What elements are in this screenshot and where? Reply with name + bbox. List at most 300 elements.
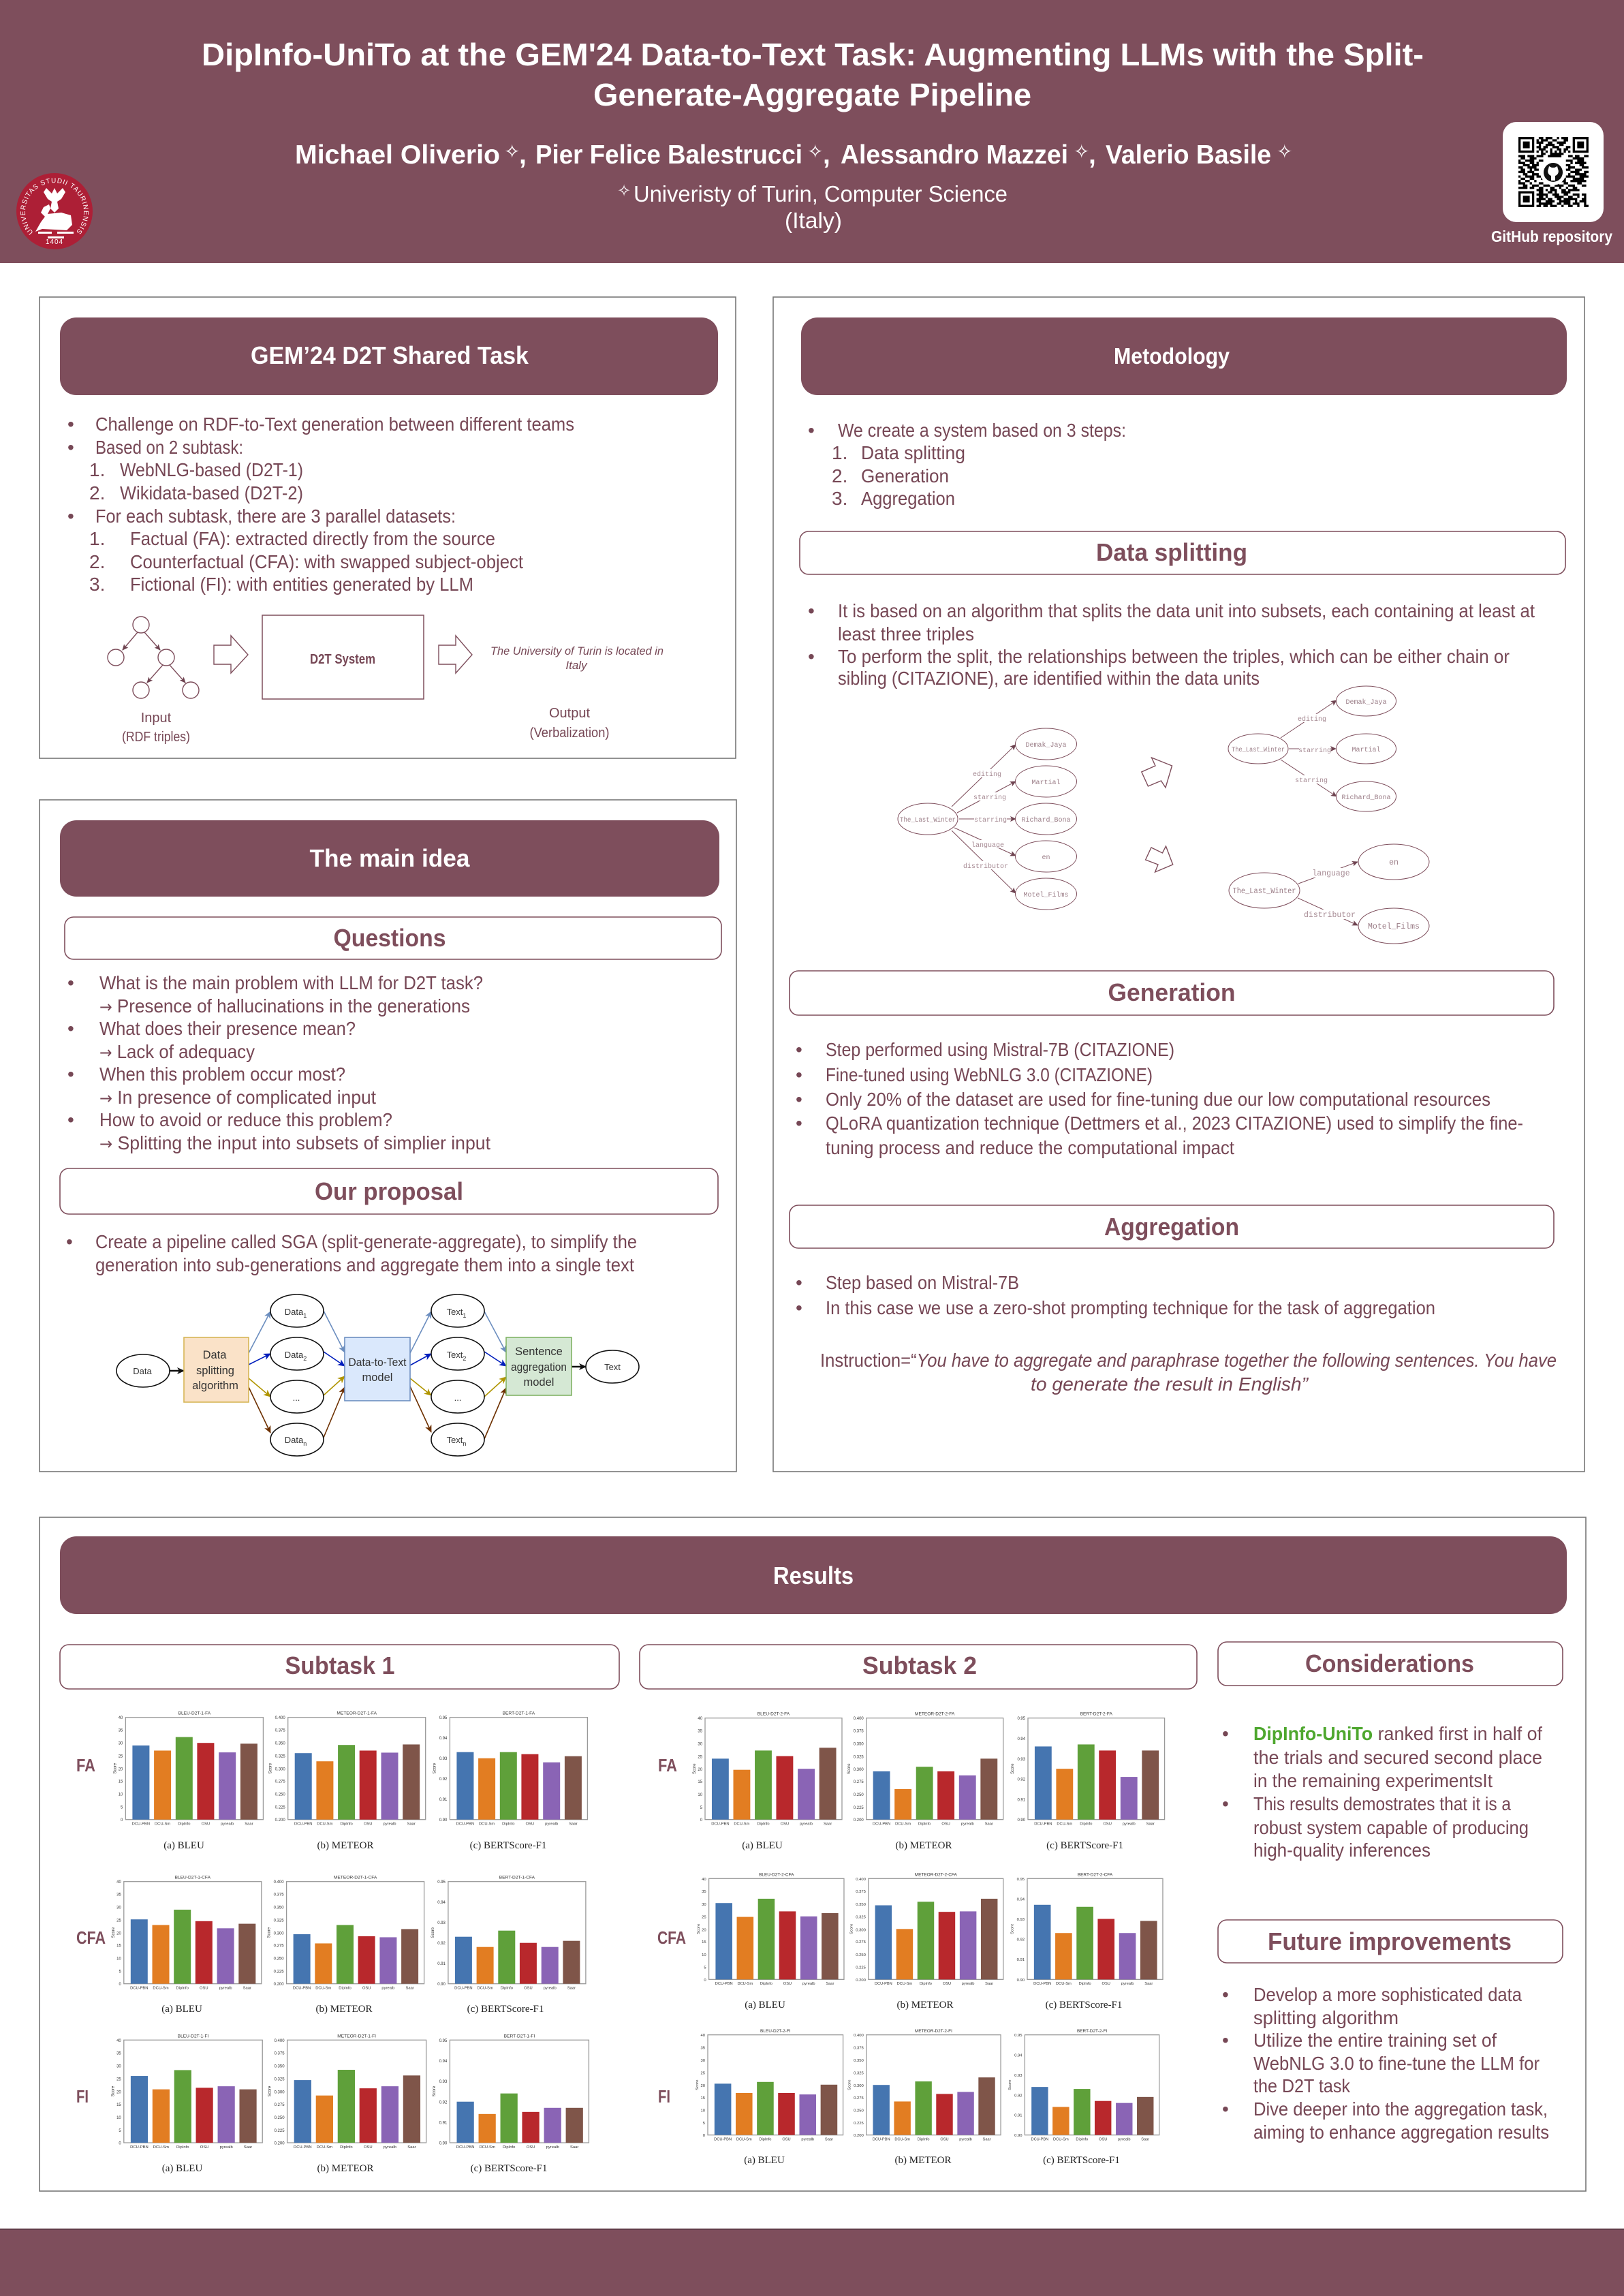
text block: future improvements: Develop a more sophisticated data xyxy=(1253,1984,1522,2005)
chart: BERT D2T-2 FA: (c) BERTScore-F1 xyxy=(1046,1840,1123,1851)
chart: METEOR D2T-1 FA: 0.325 xyxy=(275,1755,285,1759)
chart: BERT D2T-1 CFA: 0.93 xyxy=(437,1921,446,1925)
diagram: split graph 1: editing xyxy=(1298,715,1326,724)
chart: METEOR D2T-2 CFA xyxy=(849,1872,1003,2011)
sub-heading: Aggregation: Aggregation xyxy=(1104,1213,1239,1241)
authors: Pier Felice Balestrucci xyxy=(535,140,802,170)
chart: METEOR D2T-2 FI: 0.250 xyxy=(854,2109,864,2113)
text block: considerations: the trials and secured second place xyxy=(1253,1747,1542,1768)
chart: METEOR D2T-2 CFA: 0.250 xyxy=(856,1953,866,1957)
chart: BERT D2T-2 FI: 0.91 xyxy=(1014,2114,1022,2118)
chart: METEOR D2T-1 FA: (b) METEOR xyxy=(317,1840,373,1851)
chart: BLEU D2T-2 CFA: 0 xyxy=(704,1979,706,1983)
chart: METEOR D2T-1 CFA: METEOR-D2T-1-CFA xyxy=(334,1876,377,1880)
chart: METEOR D2T-1 FA: 0.200 xyxy=(275,1818,285,1822)
diagram: split graph 1: starring xyxy=(1298,747,1331,755)
chart: METEOR D2T-1 FI: 0.300 xyxy=(274,2091,285,2095)
chart: METEOR D2T-2 FA: pyrealb xyxy=(961,1822,974,1827)
chart: METEOR D2T-2 FI: OSU xyxy=(940,2138,949,2142)
chart: BERT D2T-1 FI: DCU-Sm xyxy=(479,2145,495,2150)
chart: BERT D2T-1 FI: 0.93 xyxy=(439,2080,448,2084)
chart: BERT D2T-1 FA: 0.94 xyxy=(439,1737,448,1741)
chart: METEOR D2T-2 FA: DipInfo xyxy=(918,1822,931,1827)
chart: METEOR D2T-1 FA: DCU-PBN xyxy=(294,1822,312,1827)
chart: BLEU D2T-2 FA: 35 xyxy=(698,1730,703,1734)
chart: BERT D2T-2 FA: Saar xyxy=(1146,1822,1155,1827)
chart: METEOR D2T-2 CFA: METEOR-D2T-2-CFA xyxy=(915,1872,958,1877)
sub-heading: Considerations xyxy=(1218,1642,1563,1686)
chart: BERT D2T-2 FI: 0.92 xyxy=(1014,2094,1022,2098)
chart: METEOR D2T-2 CFA: DCU-Sm xyxy=(897,1982,913,1986)
text block: future improvements: • xyxy=(1222,2098,1229,2120)
text block: task description: • xyxy=(67,437,74,458)
diagram: SGA pipeline: ... xyxy=(454,1393,461,1403)
chart: BERT D2T-1 FA: 0.93 xyxy=(439,1757,448,1761)
chart: BLEU D2T-1 FA: (a) BLEU xyxy=(163,1840,204,1851)
text block: task description: Wikidata-based (D2T-2) xyxy=(120,482,303,503)
authors: , xyxy=(1089,140,1096,170)
text block: future improvements xyxy=(1222,1984,1549,2143)
chart: BLEU D2T-1 FI xyxy=(112,2034,262,2174)
chart: BLEU D2T-2 CFA: Saar xyxy=(826,1982,834,1986)
chart: METEOR D2T-2 FA: 0.375 xyxy=(854,1730,864,1734)
chart: BERT D2T-2 FA: Score xyxy=(1011,1763,1015,1774)
chart: METEOR D2T-1 CFA xyxy=(268,1876,424,2015)
icon: University of Turin seal: 1404 xyxy=(46,238,63,246)
diagram: input tree: (RDF triples) xyxy=(122,730,190,745)
diagram: split graph 2: language xyxy=(1312,869,1350,878)
chart: METEOR D2T-2 FA xyxy=(847,1712,1003,1851)
text block: questions: What does their presence mean? xyxy=(99,1018,356,1039)
authors: ✧ xyxy=(1277,141,1292,162)
diagram: SGA pipeline: algorithm xyxy=(192,1380,238,1392)
sub-heading: Data splitting xyxy=(800,531,1565,574)
text block: questions: • xyxy=(67,972,74,993)
chart: METEOR D2T-2 CFA: 0.350 xyxy=(856,1903,866,1907)
chart: BLEU D2T-2 FA: (a) BLEU xyxy=(742,1840,783,1851)
affiliation xyxy=(617,181,1008,233)
chart: BLEU D2T-1 CFA: Saar xyxy=(243,1987,251,1991)
chart: METEOR D2T-2 FI xyxy=(847,2029,1001,2166)
chart: BLEU D2T-1 CFA: 30 xyxy=(116,1906,121,1910)
chart: BERT D2T-2 FA: pyrealb xyxy=(1123,1822,1136,1827)
chart: BERT D2T-1 FA: 0.92 xyxy=(439,1778,448,1782)
chart: BERT D2T-2 FI: Score xyxy=(1008,2080,1012,2090)
chart: BLEU D2T-1 FI: BLEU-D2T-1-FI xyxy=(178,2034,209,2038)
diagram: SGA pipeline: n xyxy=(303,1440,307,1447)
text block: future improvements: Utilize the entire training set of xyxy=(1253,2030,1497,2051)
chart: BLEU D2T-1 CFA xyxy=(112,1876,262,2015)
output sentence and label: Output xyxy=(549,706,590,721)
chart: METEOR D2T-2 CFA: DipInfo xyxy=(920,1982,932,1986)
chart: METEOR D2T-1 CFA: 0.350 xyxy=(274,1906,284,1910)
instruction prompt xyxy=(820,1350,1557,1395)
text block: task description: WebNLG-based (D2T-1) xyxy=(120,459,303,480)
chart: BERT D2T-1 FI: OSU xyxy=(527,2145,535,2150)
chart: BLEU D2T-1 FI: pyrealb xyxy=(220,2145,233,2150)
text block: task description: Factual (FA): extracted directly from the source xyxy=(130,528,495,549)
chart: BERT D2T-2 CFA: 0.90 xyxy=(1017,1979,1025,1983)
diagram: SGA pipeline: Data xyxy=(285,1307,303,1317)
chart: BERT D2T-1 FA: Saar xyxy=(569,1822,578,1827)
text block: questions: How to avoid or reduce this problem? xyxy=(99,1109,392,1130)
text block: generation: • xyxy=(796,1113,802,1134)
chart: BLEU D2T-2 CFA: Score xyxy=(697,1923,701,1934)
chart: BERT D2T-1 FI: 0.90 xyxy=(439,2142,448,2146)
chart: BLEU D2T-1 FI: (a) BLEU xyxy=(162,2163,202,2174)
chart: METEOR D2T-2 CFA: (b) METEOR xyxy=(897,2000,953,2011)
chart: BLEU D2T-1 FI: DCU-PBN xyxy=(130,2145,149,2150)
chart: BLEU D2T-2 FI: DipInfo xyxy=(759,2138,771,2142)
chart: BERT D2T-1 FI: 0.94 xyxy=(439,2060,448,2064)
chart: BERT D2T-1 CFA: 0.91 xyxy=(437,1962,446,1966)
chart: BLEU D2T-1 FA: 5 xyxy=(121,1806,123,1810)
sub-heading: Questions: Questions xyxy=(334,924,446,952)
chart: BLEU D2T-1 CFA: 5 xyxy=(119,1970,121,1974)
text block: task description: 3. xyxy=(89,574,105,595)
chart: METEOR D2T-2 FA: Saar xyxy=(985,1822,993,1827)
chart: BLEU D2T-1 FI: 15 xyxy=(116,2103,121,2107)
text block: generation: Step performed using Mistral-7B (CITAZIONE) xyxy=(826,1039,1174,1060)
diagram: full RDF graph: Demak_Jaya xyxy=(1025,741,1067,749)
chart: BERT D2T-1 CFA: 0.90 xyxy=(437,1983,446,1987)
chart: BERT D2T-1 FA: (c) BERTScore-F1 xyxy=(470,1840,546,1851)
chart: METEOR D2T-1 FI: METEOR-D2T-1-FI xyxy=(337,2034,376,2038)
chart: BLEU D2T-2 FI: 5 xyxy=(703,2122,706,2126)
chart: BLEU D2T-1 FA: 0 xyxy=(121,1818,123,1822)
diagram: SGA pipeline: 2 xyxy=(463,1355,466,1362)
panel: GEM'24 D2T Shared Task xyxy=(40,297,736,758)
text block: generation xyxy=(796,1039,1523,1158)
chart: METEOR D2T-2 FI: pyrealb xyxy=(959,2138,972,2142)
chart: BERT D2T-2 CFA: OSU xyxy=(1102,1982,1110,1986)
diagram: split graph 1: Demak_Jaya xyxy=(1345,698,1387,707)
row label FI subtask 2: FI xyxy=(658,2086,670,2107)
chart: BLEU D2T-2 FI: 40 xyxy=(701,2034,706,2038)
arrow xyxy=(1142,758,1172,788)
chart: BLEU D2T-2 FA: 0 xyxy=(700,1818,703,1822)
instruction prompt: Instruction=“You have to aggregate and paraphrase together the following sentences. You have xyxy=(820,1350,1557,1371)
diagram: full RDF graph: starring xyxy=(973,794,1006,802)
chart: BLEU D2T-1 FI: 10 xyxy=(116,2116,121,2120)
chart: METEOR D2T-2 FA: DCU-PBN xyxy=(873,1822,890,1827)
chart: METEOR D2T-2 FI: Saar xyxy=(983,2138,991,2142)
chart: METEOR D2T-1 FA: 0.350 xyxy=(275,1742,285,1746)
sub-heading: Generation: Generation xyxy=(1108,978,1236,1006)
sub-heading: Future improvements xyxy=(1218,1920,1563,1963)
chart: BLEU D2T-2 FA: Saar xyxy=(824,1822,832,1827)
chart: BLEU D2T-1 FA: 15 xyxy=(119,1780,123,1784)
chart: BERT D2T-2 CFA: Score xyxy=(1010,1923,1014,1934)
chart: METEOR D2T-1 FA: 0.375 xyxy=(275,1729,285,1733)
chart: BERT D2T-2 FI: BERT-D2T-2-FI xyxy=(1077,2029,1107,2034)
sub-heading: Subtask 1 xyxy=(60,1645,619,1689)
chart: BERT D2T-1 FA: 0.90 xyxy=(439,1818,448,1822)
text block: task description xyxy=(67,414,574,595)
chart: METEOR D2T-2 FA: 0.250 xyxy=(854,1793,864,1797)
diagram: SGA pipeline: Data xyxy=(285,1350,303,1360)
text block: task description: 2. xyxy=(89,482,105,503)
text block: steps: Aggregation xyxy=(861,488,955,509)
chart: BERT D2T-1 CFA: Saar xyxy=(567,1987,576,1991)
row label FA subtask 2: FA xyxy=(658,1755,677,1775)
chart: BLEU D2T-1 FI: 20 xyxy=(116,2091,121,2095)
text block: task description: Counterfactual (CFA): with swapped subject-object xyxy=(130,551,523,572)
chart: METEOR D2T-2 CFA: DCU-PBN xyxy=(875,1982,892,1986)
chart: BERT D2T-1 FA xyxy=(433,1711,587,1851)
chart: BERT D2T-1 CFA: 0.95 xyxy=(437,1880,446,1884)
text block: future improvements: • xyxy=(1222,2030,1229,2051)
arrows xyxy=(170,1311,586,1439)
diagram: SGA pipeline: Text xyxy=(604,1362,621,1372)
chart: BLEU D2T-2 CFA: DCU-PBN xyxy=(715,1982,733,1986)
chart: BLEU D2T-1 CFA: BLEU-D2T-1-CFA xyxy=(175,1876,211,1880)
chart: BERT D2T-2 FA: 0.93 xyxy=(1017,1758,1026,1762)
chart: BLEU D2T-1 FI: DCU-Sm xyxy=(153,2145,169,2150)
chart: BLEU D2T-2 FI: 10 xyxy=(701,2109,706,2113)
chart: METEOR D2T-1 FI: (b) METEOR xyxy=(317,2163,373,2174)
chart: METEOR D2T-2 CFA: Score xyxy=(849,1923,854,1934)
row label FI subtask 1: FI xyxy=(76,2086,89,2107)
diagram: SGA pipeline: Data xyxy=(203,1349,227,1361)
diagram: split graph 2 xyxy=(1229,844,1429,944)
chart: BLEU D2T-2 FI: 20 xyxy=(701,2084,706,2088)
sub-heading: Subtask 2: Subtask 2 xyxy=(862,1651,977,1679)
chart: BERT D2T-2 FA: OSU xyxy=(1103,1822,1112,1827)
box: D2T system xyxy=(262,615,424,699)
output sentence and label: Italy xyxy=(565,659,588,672)
chart: BERT D2T-1 FI: Saar xyxy=(570,2145,578,2150)
diagram: full RDF graph: language xyxy=(971,841,1004,850)
chart: BLEU D2T-1 FI: 35 xyxy=(116,2051,121,2055)
chart: METEOR D2T-1 FA: 0.275 xyxy=(275,1780,285,1784)
chart: BLEU D2T-1 FA: BLEU-D2T-1-FA xyxy=(178,1711,211,1716)
diagram: input tree xyxy=(108,617,199,745)
chart: BERT D2T-1 FI xyxy=(433,2034,589,2174)
chart: BLEU D2T-2 CFA: 30 xyxy=(702,1903,706,1907)
heading xyxy=(60,1536,1567,1614)
text block: aggregation: In this case we use a zero-shot prompting technique for the task of aggregation xyxy=(826,1297,1435,1318)
arrow xyxy=(439,636,472,673)
chart: BERT D2T-2 CFA: Saar xyxy=(1144,1982,1153,1986)
text block: generation: Only 20% of the dataset are used for fine-tuning due our low computational resources xyxy=(826,1089,1490,1110)
authors: ✧ xyxy=(1074,141,1089,162)
diagram: SGA pipeline: Data xyxy=(133,1366,152,1376)
authors: ✧ xyxy=(807,141,823,162)
row label FA subtask 1: FA xyxy=(76,1755,95,1775)
chart: BLEU D2T-1 FA: pyrealb xyxy=(221,1822,234,1827)
chart: BERT D2T-1 FI: DipInfo xyxy=(503,2145,515,2150)
diagram: split graph 1: The_Last_Winter xyxy=(1232,746,1285,754)
chart: METEOR D2T-2 FI: Score xyxy=(847,2080,852,2090)
chart: BLEU D2T-2 FA: 25 xyxy=(698,1755,703,1759)
text block: task description: 2. xyxy=(89,551,105,572)
chart: METEOR D2T-1 CFA: 0.325 xyxy=(274,1919,284,1923)
chart: BERT D2T-1 FI: (c) BERTScore-F1 xyxy=(471,2163,547,2174)
diagram: SGA pipeline: Text xyxy=(447,1307,463,1317)
chart: BLEU D2T-1 CFA: OSU xyxy=(200,1987,208,1991)
chart: METEOR D2T-1 FI xyxy=(268,2034,426,2174)
chart: METEOR D2T-1 CFA: 0.375 xyxy=(274,1893,284,1897)
diagram: split graph 1 xyxy=(1228,686,1396,811)
text block: data splitting: To perform the split, the relationships between the triples, which can be either chain or xyxy=(838,646,1510,667)
chart: METEOR D2T-2 FI: 0.350 xyxy=(854,2059,864,2063)
chart: BERT D2T-1 CFA: OSU xyxy=(524,1987,533,1991)
chart: METEOR D2T-2 CFA: OSU xyxy=(943,1982,951,1986)
chart: BLEU D2T-2 FA: 30 xyxy=(698,1742,703,1746)
chart: BERT D2T-1 FI: BERT-D2T-1-FI xyxy=(504,2034,535,2038)
diagram: SGA pipeline: Text xyxy=(447,1350,463,1360)
chart: METEOR D2T-1 FI: 0.275 xyxy=(274,2103,285,2107)
chart: METEOR D2T-1 FI: OSU xyxy=(364,2145,373,2150)
panel: Results xyxy=(40,1517,1586,2191)
chart: METEOR D2T-1 FA: Saar xyxy=(407,1822,416,1827)
chart: METEOR D2T-1 CFA: 0.225 xyxy=(274,1970,284,1974)
text block: future improvements: • xyxy=(1222,1984,1229,2005)
chart: METEOR D2T-1 CFA: 0.200 xyxy=(274,1983,284,1987)
affiliation: Univeristy of Turin, Computer Science xyxy=(634,181,1008,206)
chart: BERT D2T-2 FI: 0.93 xyxy=(1014,2074,1022,2078)
chart: BERT D2T-1 FI: DCU-PBN xyxy=(456,2145,474,2150)
chart: BERT D2T-2 FA: DCU-PBN xyxy=(1034,1822,1052,1827)
chart: METEOR D2T-2 FI: 0.375 xyxy=(854,2046,864,2050)
chart: BLEU D2T-1 CFA: DCU-PBN xyxy=(130,1987,149,1991)
text block: steps: 3. xyxy=(832,488,847,509)
chart: BLEU D2T-2 FI: Saar xyxy=(825,2138,833,2142)
box: D2T system: D2T System xyxy=(310,652,375,667)
text block: aggregation: • xyxy=(796,1272,802,1293)
text block: considerations: in the remaining experimentsIt xyxy=(1253,1770,1493,1791)
diagram: SGA pipeline: n xyxy=(463,1440,466,1447)
sub-heading: Subtask 2 xyxy=(640,1645,1197,1689)
chart: BLEU D2T-2 FI: DCU-Sm xyxy=(736,2138,752,2142)
title: DipInfo-UniTo at the GEM'24 Data-to-Text Task: Augmenting LLMs with the Split- xyxy=(202,37,1424,72)
heading: The main idea xyxy=(309,844,470,872)
chart: METEOR D2T-1 CFA: DCU-Sm xyxy=(315,1987,332,1991)
chart: METEOR D2T-1 FA: pyrealb xyxy=(383,1822,396,1827)
chart: METEOR D2T-2 CFA: 0.200 xyxy=(856,1979,866,1983)
output sentence and label xyxy=(490,645,663,741)
chart: BERT D2T-1 FA: DCU-PBN xyxy=(456,1822,474,1827)
heading: Results xyxy=(773,1562,854,1589)
chart: BLEU D2T-1 FA xyxy=(113,1711,263,1851)
chart: METEOR D2T-2 FI: DCU-PBN xyxy=(873,2138,890,2142)
text block: future improvements: the D2T task xyxy=(1253,2075,1351,2096)
chart: BERT D2T-1 FI: 0.95 xyxy=(439,2039,448,2043)
authors xyxy=(295,140,1292,170)
chart: BLEU D2T-2 CFA: BLEU-D2T-2-CFA xyxy=(759,1872,794,1877)
chart: BLEU D2T-1 FI: 40 xyxy=(116,2039,121,2043)
diagram: input tree: Input xyxy=(141,711,172,726)
text block: considerations xyxy=(1222,1723,1542,1861)
chart: BERT D2T-2 CFA: BERT-D2T-2-CFA xyxy=(1078,1872,1113,1877)
chart: METEOR D2T-2 CFA: 0.275 xyxy=(856,1940,866,1944)
chart: METEOR D2T-2 FA: 0.225 xyxy=(854,1806,864,1810)
sub-heading: Future improvements: Future improvements xyxy=(1268,1927,1512,1955)
chart: METEOR D2T-2 FI: 0.225 xyxy=(854,2122,864,2126)
chart: BLEU D2T-1 FA: 35 xyxy=(119,1729,123,1733)
chart: BLEU D2T-2 FI: OSU xyxy=(782,2138,791,2142)
chart: BLEU D2T-2 CFA: pyrealb xyxy=(802,1982,815,1986)
text block: data splitting: sibling (CITAZIONE), are identified within the data units xyxy=(838,668,1260,689)
chart: METEOR D2T-1 FI: Saar xyxy=(407,2145,416,2150)
text block: proposal: • xyxy=(66,1231,73,1252)
diagram: SGA pipeline: 1 xyxy=(463,1312,466,1319)
text block: considerations: This results demostrates that it is a xyxy=(1253,1793,1511,1814)
chart: METEOR D2T-2 FA: METEOR-D2T-2-FA xyxy=(915,1712,955,1717)
text block: questions xyxy=(67,972,490,1153)
text block: task description: • xyxy=(67,506,74,527)
text block: questions: • xyxy=(67,1018,74,1039)
chart: BLEU D2T-1 CFA: Score xyxy=(112,1927,116,1938)
chart: METEOR D2T-2 FI: METEOR-D2T-2-FI xyxy=(915,2029,952,2034)
chart: BLEU D2T-2 FA: 20 xyxy=(698,1768,703,1772)
diagram: full RDF graph: Richard_Bona xyxy=(1021,816,1071,824)
chart: METEOR D2T-1 FI: 0.250 xyxy=(274,2116,285,2120)
chart: BLEU D2T-1 FA: 10 xyxy=(119,1793,123,1797)
chart: BERT D2T-2 FI: OSU xyxy=(1099,2138,1107,2142)
text block: data splitting: • xyxy=(808,600,815,621)
text block: task description: Fictional (FI): with entities generated by LLM xyxy=(130,574,473,595)
chart: BERT D2T-2 FA xyxy=(1011,1712,1165,1851)
row label CFA subtask 1: CFA xyxy=(76,1927,106,1948)
chart: BLEU D2T-2 FA: DCU-Sm xyxy=(734,1822,750,1827)
chart: BERT D2T-2 CFA: 0.95 xyxy=(1017,1878,1025,1882)
chart: METEOR D2T-1 FA: 0.225 xyxy=(275,1806,285,1810)
chart: BLEU D2T-2 CFA: OSU xyxy=(783,1982,792,1986)
chart: BERT D2T-2 FI: pyrealb xyxy=(1118,2138,1131,2142)
chart: BLEU D2T-2 CFA xyxy=(697,1872,844,2011)
text block: questions: → Presence of hallucinations in the generations xyxy=(99,995,470,1017)
chart: BERT D2T-1 CFA: Score xyxy=(431,1927,435,1938)
chart: METEOR D2T-1 FI: DipInfo xyxy=(340,2145,353,2150)
chart: METEOR D2T-1 CFA: (b) METEOR xyxy=(316,2004,372,2015)
chart: BLEU D2T-2 CFA: (a) BLEU xyxy=(745,2000,785,2011)
panel: Metodology xyxy=(773,297,1584,1472)
diagram: split graph 2: en xyxy=(1389,858,1399,867)
chart: BERT D2T-1 FI: 0.91 xyxy=(439,2121,448,2125)
chart: METEOR D2T-2 FA: 0.275 xyxy=(854,1780,864,1784)
chart: BERT D2T-1 FI: Score xyxy=(433,2085,437,2097)
text block: questions: → In presence of complicated input xyxy=(99,1087,376,1108)
chart: METEOR D2T-1 FI: DCU-PBN xyxy=(294,2145,312,2150)
diagram: full RDF graph: en xyxy=(1042,854,1050,862)
chart: BLEU D2T-2 FA: DCU-PBN xyxy=(711,1822,730,1827)
diagram: split graph 1: Martial xyxy=(1352,746,1381,754)
diagram: SGA pipeline: ... xyxy=(293,1393,300,1403)
text block: data splitting: It is based on an algorithm that splits the data unit into subsets, each containing at least at xyxy=(838,600,1535,621)
chart: BLEU D2T-2 FI: 0 xyxy=(703,2134,706,2138)
chart: BERT D2T-1 FA: 0.95 xyxy=(439,1716,448,1720)
text block: task description: 1. xyxy=(89,528,105,549)
diagram: full RDF graph xyxy=(898,728,1076,910)
text block: future improvements: splitting algorithm xyxy=(1253,2007,1399,2028)
chart: METEOR D2T-1 FI: 0.350 xyxy=(274,2065,285,2068)
chart: BERT D2T-2 CFA: DCU-Sm xyxy=(1056,1982,1072,1986)
chart: BLEU D2T-2 FI: pyrealb xyxy=(801,2138,814,2142)
chart: BLEU D2T-1 FA: 40 xyxy=(119,1716,123,1720)
heading: Metodology xyxy=(1114,343,1230,369)
chart: BLEU D2T-2 FA: pyrealb xyxy=(800,1822,813,1827)
chart: BLEU D2T-1 CFA: 10 xyxy=(116,1957,121,1961)
chart: METEOR D2T-1 CFA: Saar xyxy=(405,1987,414,1991)
chart: BERT D2T-2 FI: 0.94 xyxy=(1014,2054,1022,2058)
text block: considerations: robust system capable of producing xyxy=(1253,1817,1529,1838)
chart: BERT D2T-2 CFA: 0.93 xyxy=(1017,1918,1025,1922)
chart: METEOR D2T-2 FA: 0.350 xyxy=(854,1742,864,1746)
chart: BLEU D2T-2 FA xyxy=(693,1712,842,1851)
text block: steps: Data splitting xyxy=(861,442,965,463)
